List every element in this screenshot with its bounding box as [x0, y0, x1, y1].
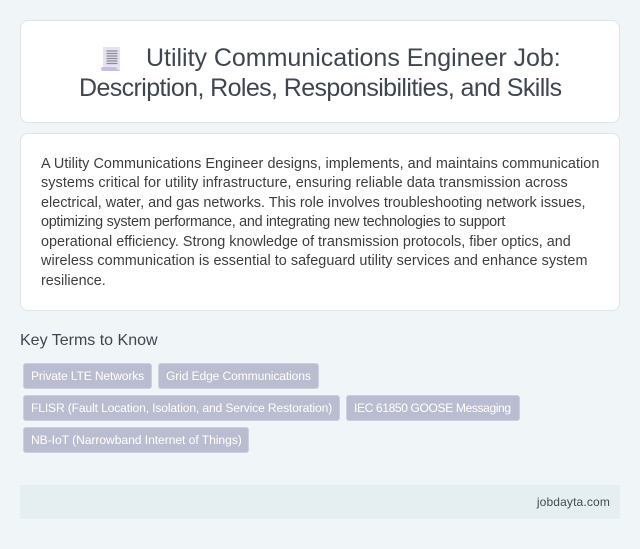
- tag: private LTE: [23, 363, 152, 389]
- title: Utility Communications Engineer Job:: [146, 44, 561, 72]
- tag: grid edge: Grid Edge Communications: [166, 369, 311, 383]
- icon: document scroll: [101, 47, 120, 71]
- description text: wireless communication is essential to safeguard utility services and enhance system: [41, 253, 588, 269]
- description text: systems critical for utility infrastructure, ensuring reliable data transmission across: [41, 175, 568, 191]
- tag: IEC 61850: IEC 61850 GOOSE Messaging: [354, 401, 511, 415]
- tag: NB-IoT: NB-IoT (Narrowband Internet of Things): [31, 433, 242, 447]
- description text: A Utility Communications Engineer designs, implements, and maintains communication: [41, 156, 599, 172]
- heading: key terms: Key Terms to Know: [20, 332, 158, 349]
- tag: IEC 61850: [346, 395, 520, 421]
- footer bar: [20, 485, 620, 519]
- description text: electrical, water, and gas networks. This role involves troubleshooting network issues,: [41, 195, 585, 211]
- header panel: [20, 20, 620, 123]
- title: [79, 44, 562, 102]
- tag: FLISR: [23, 395, 340, 421]
- footer text: jobdayta.com: [537, 495, 610, 509]
- tag: NB-IoT: [23, 427, 249, 453]
- tag: FLISR: FLISR (Fault Location, Isolation, and Service Restoration): [31, 401, 332, 415]
- description text: optimizing system performance, and integrating new technologies to support: [41, 214, 505, 230]
- description text: [41, 156, 599, 289]
- tag: grid edge: [158, 363, 319, 389]
- tag: private LTE: Private LTE Networks: [31, 369, 144, 383]
- description text: operational efficiency. Strong knowledge of transmission protocols, fiber optics, and: [41, 234, 571, 250]
- title: Description, Roles, Responsibilities, and Skills: [79, 74, 562, 102]
- description panel: [20, 133, 620, 311]
- tags: [23, 363, 520, 453]
- description text: resilience.: [41, 273, 106, 289]
